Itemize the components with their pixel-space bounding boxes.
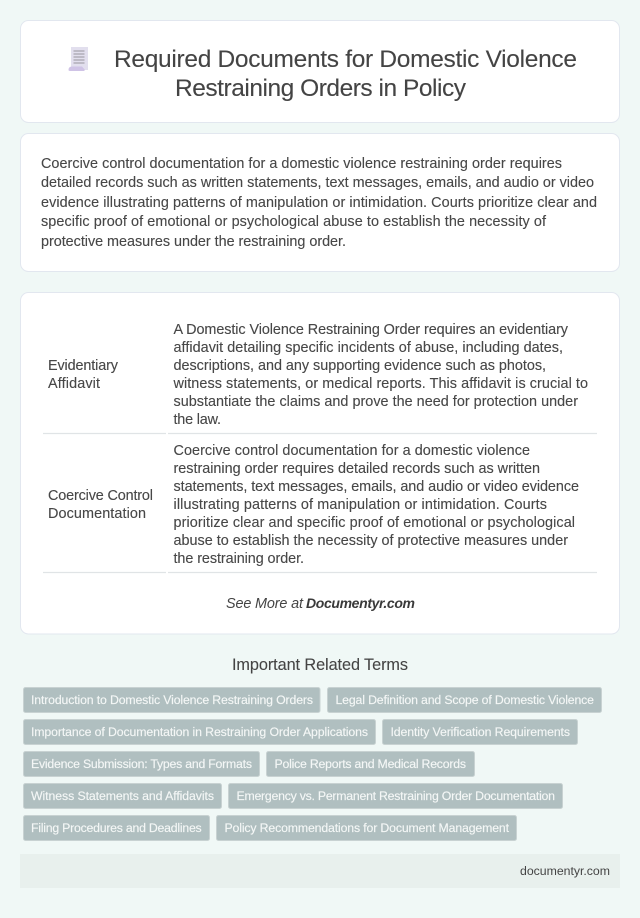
chip: Introduction to Domestic Violence Restraining Orders xyxy=(31,693,313,707)
see more link: Documentyr.com xyxy=(306,595,415,611)
footer site name: documentyr.com xyxy=(520,864,610,878)
title: Required Documents for Domestic Violence xyxy=(114,46,577,73)
row label: Coercive Control xyxy=(48,488,153,504)
heading: important related terms: Important Related Terms xyxy=(232,656,408,674)
summary text: detailed records such as written statements, text messages, emails, and audio or video xyxy=(41,175,594,191)
row description: witness statements, or medical reports. This affidavit is crucial to xyxy=(172,376,588,392)
chip: Identity Verification Requirements xyxy=(390,725,570,739)
row description: abuse to establish the necessity of protective measures under xyxy=(174,533,568,549)
summary text: protective measures under the restraining order. xyxy=(41,234,346,250)
row label: Evidentiary xyxy=(48,358,119,374)
row label: Documentation xyxy=(48,506,146,522)
row description: the restraining order. xyxy=(174,551,304,567)
panel: title header xyxy=(20,20,620,122)
icon: document scroll xyxy=(68,47,88,71)
row description: descriptions, and any supporting evidence such as photos, xyxy=(174,358,546,374)
chip xyxy=(266,752,474,776)
row description: the law. xyxy=(174,412,221,428)
see more link: See More at xyxy=(226,596,304,612)
row description: illustrating patterns of manipulation or intimidation. Courts xyxy=(174,497,547,513)
row: evidentiary affidavit xyxy=(48,322,588,428)
chip: Evidence Submission: Types and Formats xyxy=(31,757,252,771)
chip: Witness Statements and Affidavits xyxy=(31,789,214,803)
chip xyxy=(216,816,516,840)
row description: prioritize clear and specific proof of emotional or psychological xyxy=(174,515,575,531)
summary text: Coercive control documentation for a domestic violence restraining order requires xyxy=(41,156,562,172)
chip: Emergency vs. Permanent Restraining Order Documentation xyxy=(236,789,555,803)
row label xyxy=(48,488,153,522)
row description: statements, text messages, emails, and audio or video evidence xyxy=(174,479,579,495)
summary text: evidence illustrating patterns of manipulation or intimidation. Courts prioritize clear and xyxy=(41,195,597,211)
chip: Filing Procedures and Deadlines xyxy=(31,821,202,835)
row label xyxy=(48,358,119,392)
row description: affidavit detailing specific incidents of abuse, including dates, xyxy=(174,340,563,356)
panel: documents table xyxy=(20,292,620,634)
row description xyxy=(172,322,588,428)
chip: Policy Recommendations for Document Management xyxy=(224,821,510,835)
summary text: specific proof of emotional or psychological abuse to establish the necessity of xyxy=(41,214,547,230)
chip xyxy=(24,688,320,712)
row description: Coercive control documentation for a domestic violence xyxy=(174,443,530,459)
see more link xyxy=(226,595,415,612)
chip xyxy=(328,688,602,712)
chip xyxy=(24,720,376,744)
chip xyxy=(24,816,210,840)
row description: A Domestic Violence Restraining Order requires an evidentiary xyxy=(174,322,569,338)
panel: summary paragraph xyxy=(20,134,620,272)
related term chips xyxy=(24,688,602,840)
title: Restraining Orders in Policy xyxy=(175,75,467,102)
footer bar xyxy=(20,854,620,888)
chip: Legal Definition and Scope of Domestic Violence xyxy=(336,693,594,707)
row label: Affidavit xyxy=(48,376,100,392)
chip xyxy=(24,752,260,776)
chip xyxy=(24,784,222,808)
row description xyxy=(174,443,579,567)
chip: Police Reports and Medical Records xyxy=(274,757,466,771)
chip xyxy=(382,720,578,744)
row: coercive control documentation xyxy=(48,443,579,567)
row description: substantiate the claims and prove the need for protection under xyxy=(174,394,578,410)
chip: Importance of Documentation in Restraining Order Applications xyxy=(31,725,368,739)
summary text xyxy=(41,156,597,250)
chip xyxy=(228,784,562,808)
row description: restraining order requires detailed records such as written xyxy=(174,461,540,477)
title xyxy=(114,46,577,102)
